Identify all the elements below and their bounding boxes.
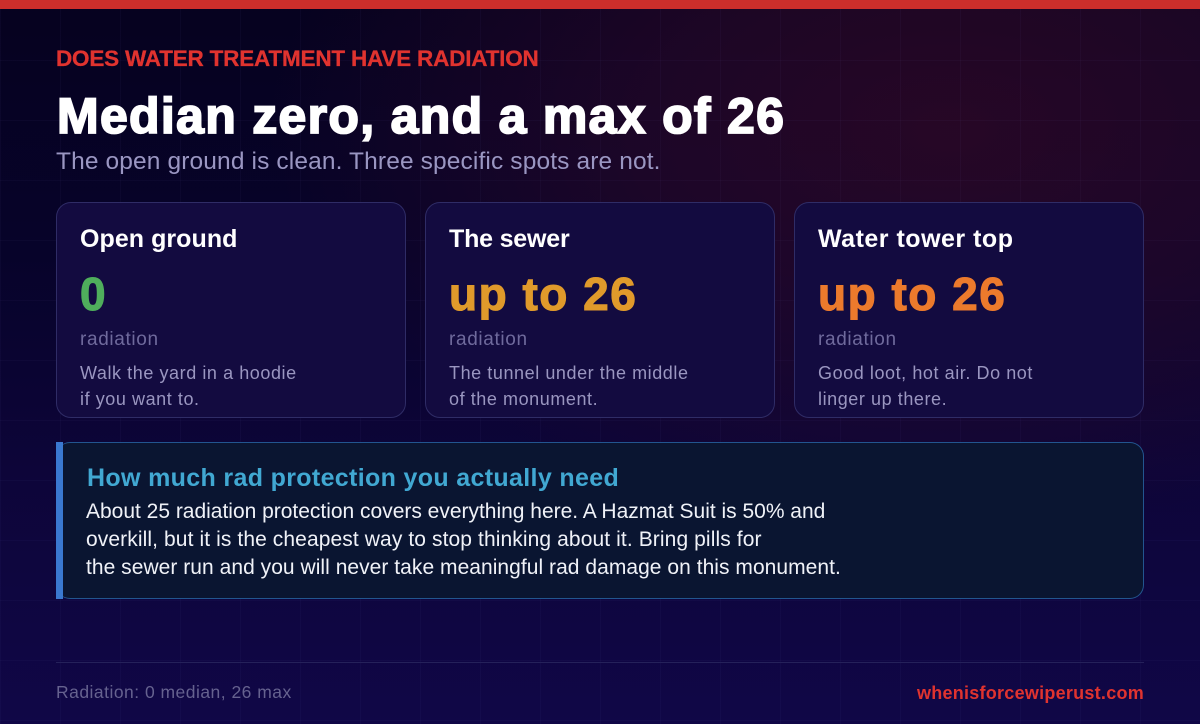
callout accent bar	[56, 442, 63, 598]
callout body	[86, 500, 841, 579]
footer divider	[56, 662, 1144, 663]
panel: open ground	[56, 202, 406, 418]
value: up to 26: up to 26	[818, 268, 1006, 320]
callout: rad protection	[56, 442, 1144, 599]
card heading: the sewer: The sewer	[449, 225, 569, 253]
card heading: water tower top: Water tower top	[818, 225, 1013, 253]
description	[80, 363, 297, 409]
callout body: the sewer run and you will never take meaningful rad damage on this monument.	[86, 556, 841, 579]
value: zero radiation: 0	[80, 268, 107, 320]
description: if you want to.	[80, 389, 200, 409]
eyebrow heading: DOES WATER TREATMENT HAVE RADIATION	[56, 46, 539, 71]
unit label: radiation	[818, 329, 897, 350]
panel: water tower top	[794, 202, 1144, 418]
description: Walk the yard in a hoodie	[80, 363, 297, 383]
description: linger up there.	[818, 389, 947, 409]
subtitle: The open ground is clean. Three specific spots are not.	[56, 148, 661, 175]
footer site link: whenisforcewiperust.com	[917, 683, 1144, 703]
unit label: radiation	[449, 329, 528, 350]
card heading: open ground: Open ground	[80, 225, 237, 253]
callout body: About 25 radiation protection covers everything here. A Hazmat Suit is 50% and	[86, 500, 825, 523]
description: of the monument.	[449, 389, 598, 409]
panel: the sewer	[425, 202, 775, 418]
callout body: overkill, but it is the cheapest way to stop thinking about it. Bring pills for	[86, 528, 762, 551]
description	[449, 363, 689, 409]
description	[818, 363, 1033, 409]
description: Good loot, hot air. Do not	[818, 363, 1033, 383]
callout heading: How much rad protection you actually need	[87, 464, 619, 492]
title: Median zero, and a max of 26	[57, 88, 785, 144]
top accent bar	[0, 0, 1200, 9]
unit label: radiation	[80, 329, 159, 350]
description: The tunnel under the middle	[449, 363, 689, 383]
value: up to 26: up to 26	[449, 268, 637, 320]
footer note: Radiation: 0 median, 26 max	[56, 682, 292, 702]
